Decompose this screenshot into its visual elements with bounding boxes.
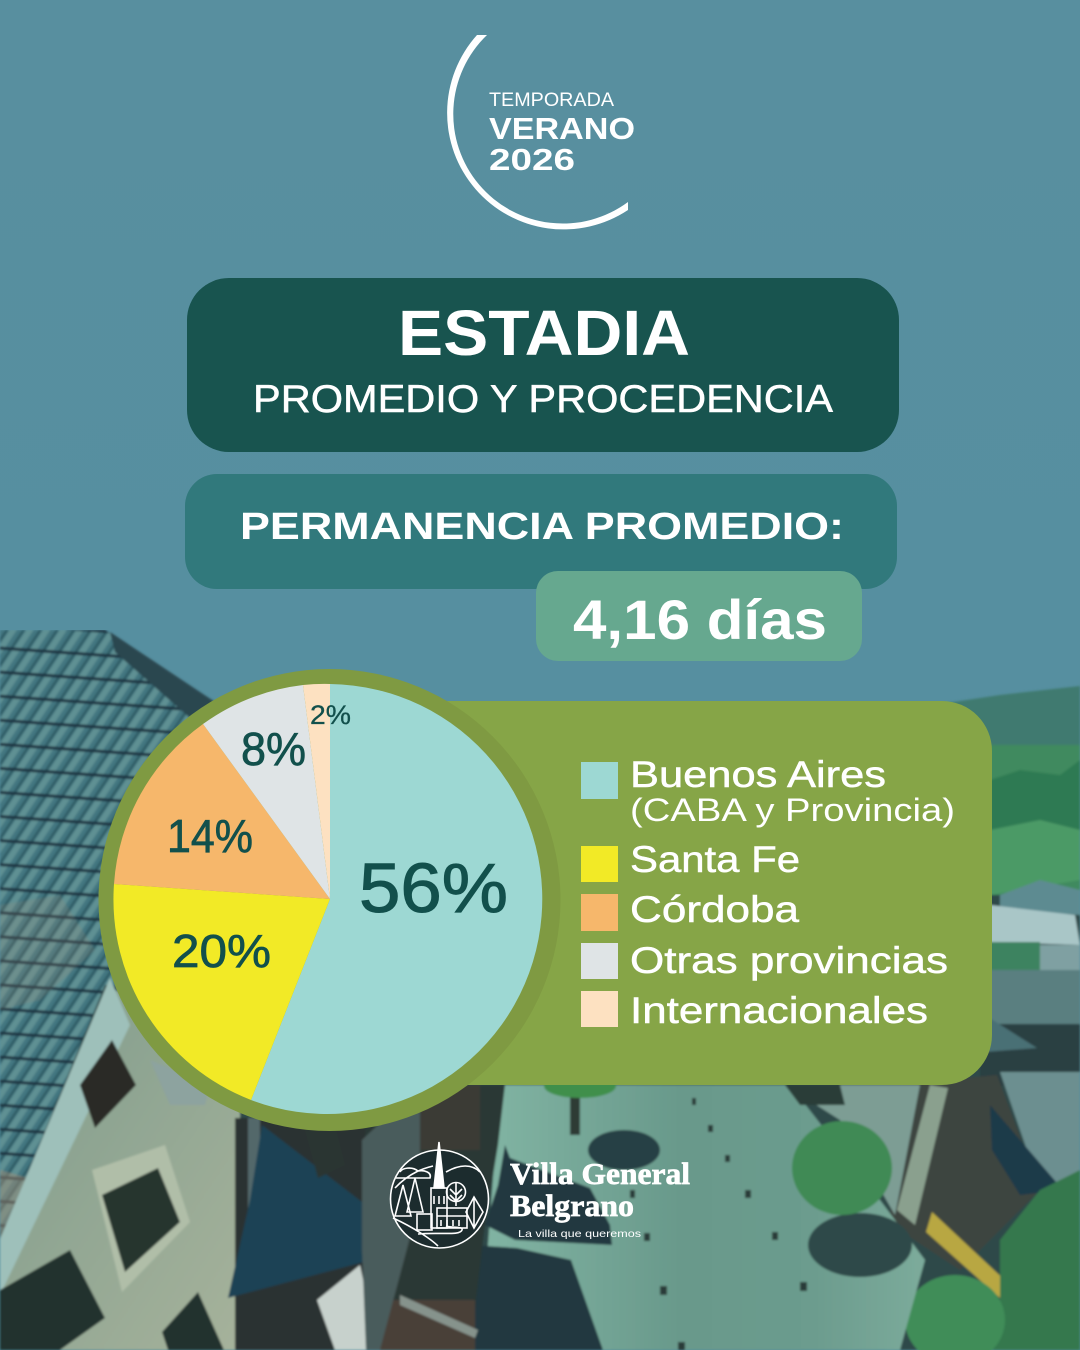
- label 20%: 20%: [172, 925, 271, 977]
- slice: santa fe 20%: [113, 884, 330, 1100]
- legend: santa fe: [581, 839, 800, 882]
- panel: legend: [400, 701, 992, 1085]
- tagline: La villa que queremos: [518, 1228, 641, 1240]
- legend: buenos aires: [581, 754, 955, 828]
- right side buildings: [890, 880, 1080, 1350]
- base shade: [0, 760, 1080, 1350]
- dark turret: [228, 1085, 420, 1350]
- slice: internacionales 2%: [303, 684, 330, 899]
- legend: buenos aires: (CABA y Provincia): [630, 792, 955, 828]
- panel: value 4,16 dias: [536, 571, 862, 661]
- legend: cordoba: Córdoba: [630, 889, 799, 930]
- legend: internacionales: Internacionales: [630, 990, 928, 1031]
- street: [480, 1085, 925, 1350]
- slice: buenos aires 56%: [251, 684, 542, 1114]
- legend: cordoba: [581, 889, 799, 931]
- label 14%: 14%: [167, 810, 253, 862]
- pale building beside street: [785, 1085, 920, 1215]
- slice: otras 8%: [203, 685, 330, 899]
- arc: [447, 35, 628, 229]
- legend: buenos aires: Buenos Aires: [630, 754, 886, 795]
- header logo: temporada verano 2026: [447, 35, 635, 229]
- value: 4,16 días: [573, 588, 827, 651]
- building with tiled roof: [0, 630, 340, 1350]
- label: PERMANENCIA PROMEDIO:: [240, 506, 844, 548]
- temporada: TEMPORADA: [489, 89, 614, 111]
- dark shadows on street: [470, 1145, 612, 1350]
- verano: VERANO: [489, 111, 635, 146]
- label 8%: 8%: [241, 723, 306, 775]
- label 56%: 56%: [359, 849, 508, 927]
- brand name: Villa General: [510, 1156, 690, 1191]
- pie chart: [98, 669, 560, 1131]
- legend: santa fe: Santa Fe: [630, 839, 800, 880]
- slice: cordoba 14%: [114, 724, 330, 899]
- label 2%: 2%: [310, 700, 351, 730]
- trees and shadows on street: [544, 1074, 912, 1277]
- panel: title: [187, 278, 899, 452]
- 2026: 2026: [489, 142, 575, 177]
- street bollards: [630, 1098, 807, 1350]
- left dark building: [360, 1085, 505, 1350]
- icon: village crest: [390, 1142, 488, 1248]
- footer logo: villa general belgrano: [390, 1142, 690, 1248]
- heading: estadia: ESTADIA: [398, 297, 690, 369]
- subheading: PROMEDIO Y PROCEDENCIA: [253, 378, 833, 421]
- brand name second line: Belgrano: [510, 1188, 634, 1223]
- mountain and forest: [940, 686, 1080, 895]
- background photo of the village: [0, 630, 1080, 1350]
- legend: otras provincias: Otras provincias: [630, 940, 948, 981]
- panel: permanencia promedio: [185, 474, 897, 589]
